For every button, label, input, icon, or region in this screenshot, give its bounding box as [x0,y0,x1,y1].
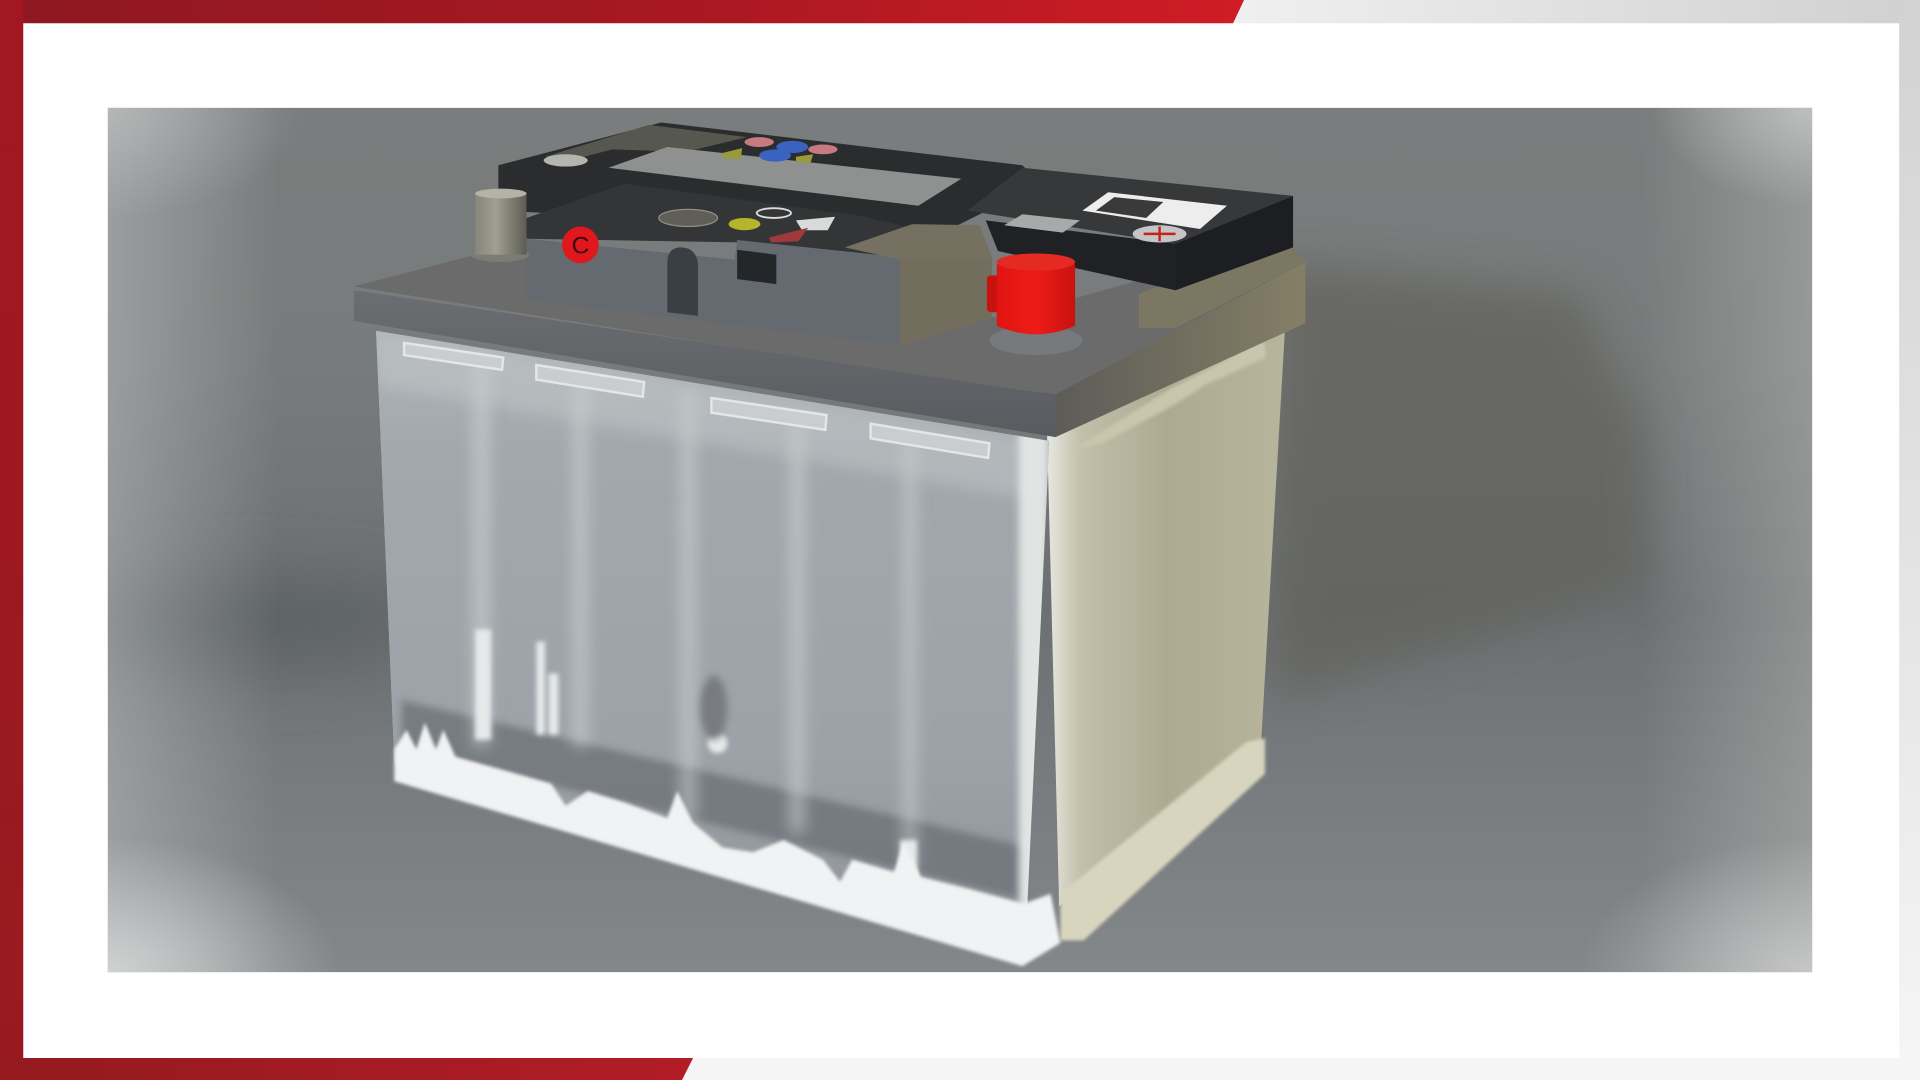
lid front lip [354,290,1056,437]
silver label [609,147,961,206]
battery right side face [1047,316,1286,940]
QR code [1096,197,1163,218]
frame: red top bar [0,0,1244,23]
block right top [967,168,1293,244]
frame: grey right bar [1899,0,1920,1080]
indicator marks [659,208,835,242]
negative terminal post [470,189,529,262]
positive terminal red cap [987,253,1082,355]
white moulded plinth [394,722,1060,966]
crystal smears [475,629,917,882]
battery [354,122,1305,966]
QR sticker [1082,192,1227,229]
block left rear [498,122,1041,233]
grey lid [354,239,1305,437]
grey terminal cover [527,184,992,345]
cover side [900,257,992,345]
black label block [498,122,1293,290]
frame: red left bar [0,0,23,1080]
frame: red bottom bar [0,1058,693,1080]
dark smudge [700,676,727,740]
white corner glow [1019,429,1048,943]
plus marking [1133,225,1187,242]
notch in cover [737,250,776,284]
right side plinth [1060,738,1265,940]
ribbed handle on side [1088,342,1266,444]
battery front face [376,331,1049,943]
white oval mark [544,154,588,167]
cover front [526,238,900,305]
block right end face [1176,196,1293,290]
frame: pale bottom bar [680,1058,1920,1080]
red C sticker: C [572,232,589,259]
lid top surface [354,256,1280,394]
frame: grey top bar [1224,0,1920,23]
dark electrolyte band [402,700,1029,900]
cover dark panel [527,184,912,257]
cover top right [845,224,992,260]
lid side lip [1056,262,1305,437]
minus sticker [1004,214,1080,233]
colour dots [722,137,838,163]
red C sticker [562,227,599,263]
faded rear edge [545,125,747,159]
vertical cell streaks [473,355,916,869]
block right front face [986,220,1176,290]
lid olive right surface [1139,248,1305,328]
light upper band [376,338,1018,496]
slot in cover [667,247,698,316]
photo backdrop [108,108,1812,972]
photo: battery on grey fabric [108,108,1812,972]
moulded tabs [404,343,989,458]
